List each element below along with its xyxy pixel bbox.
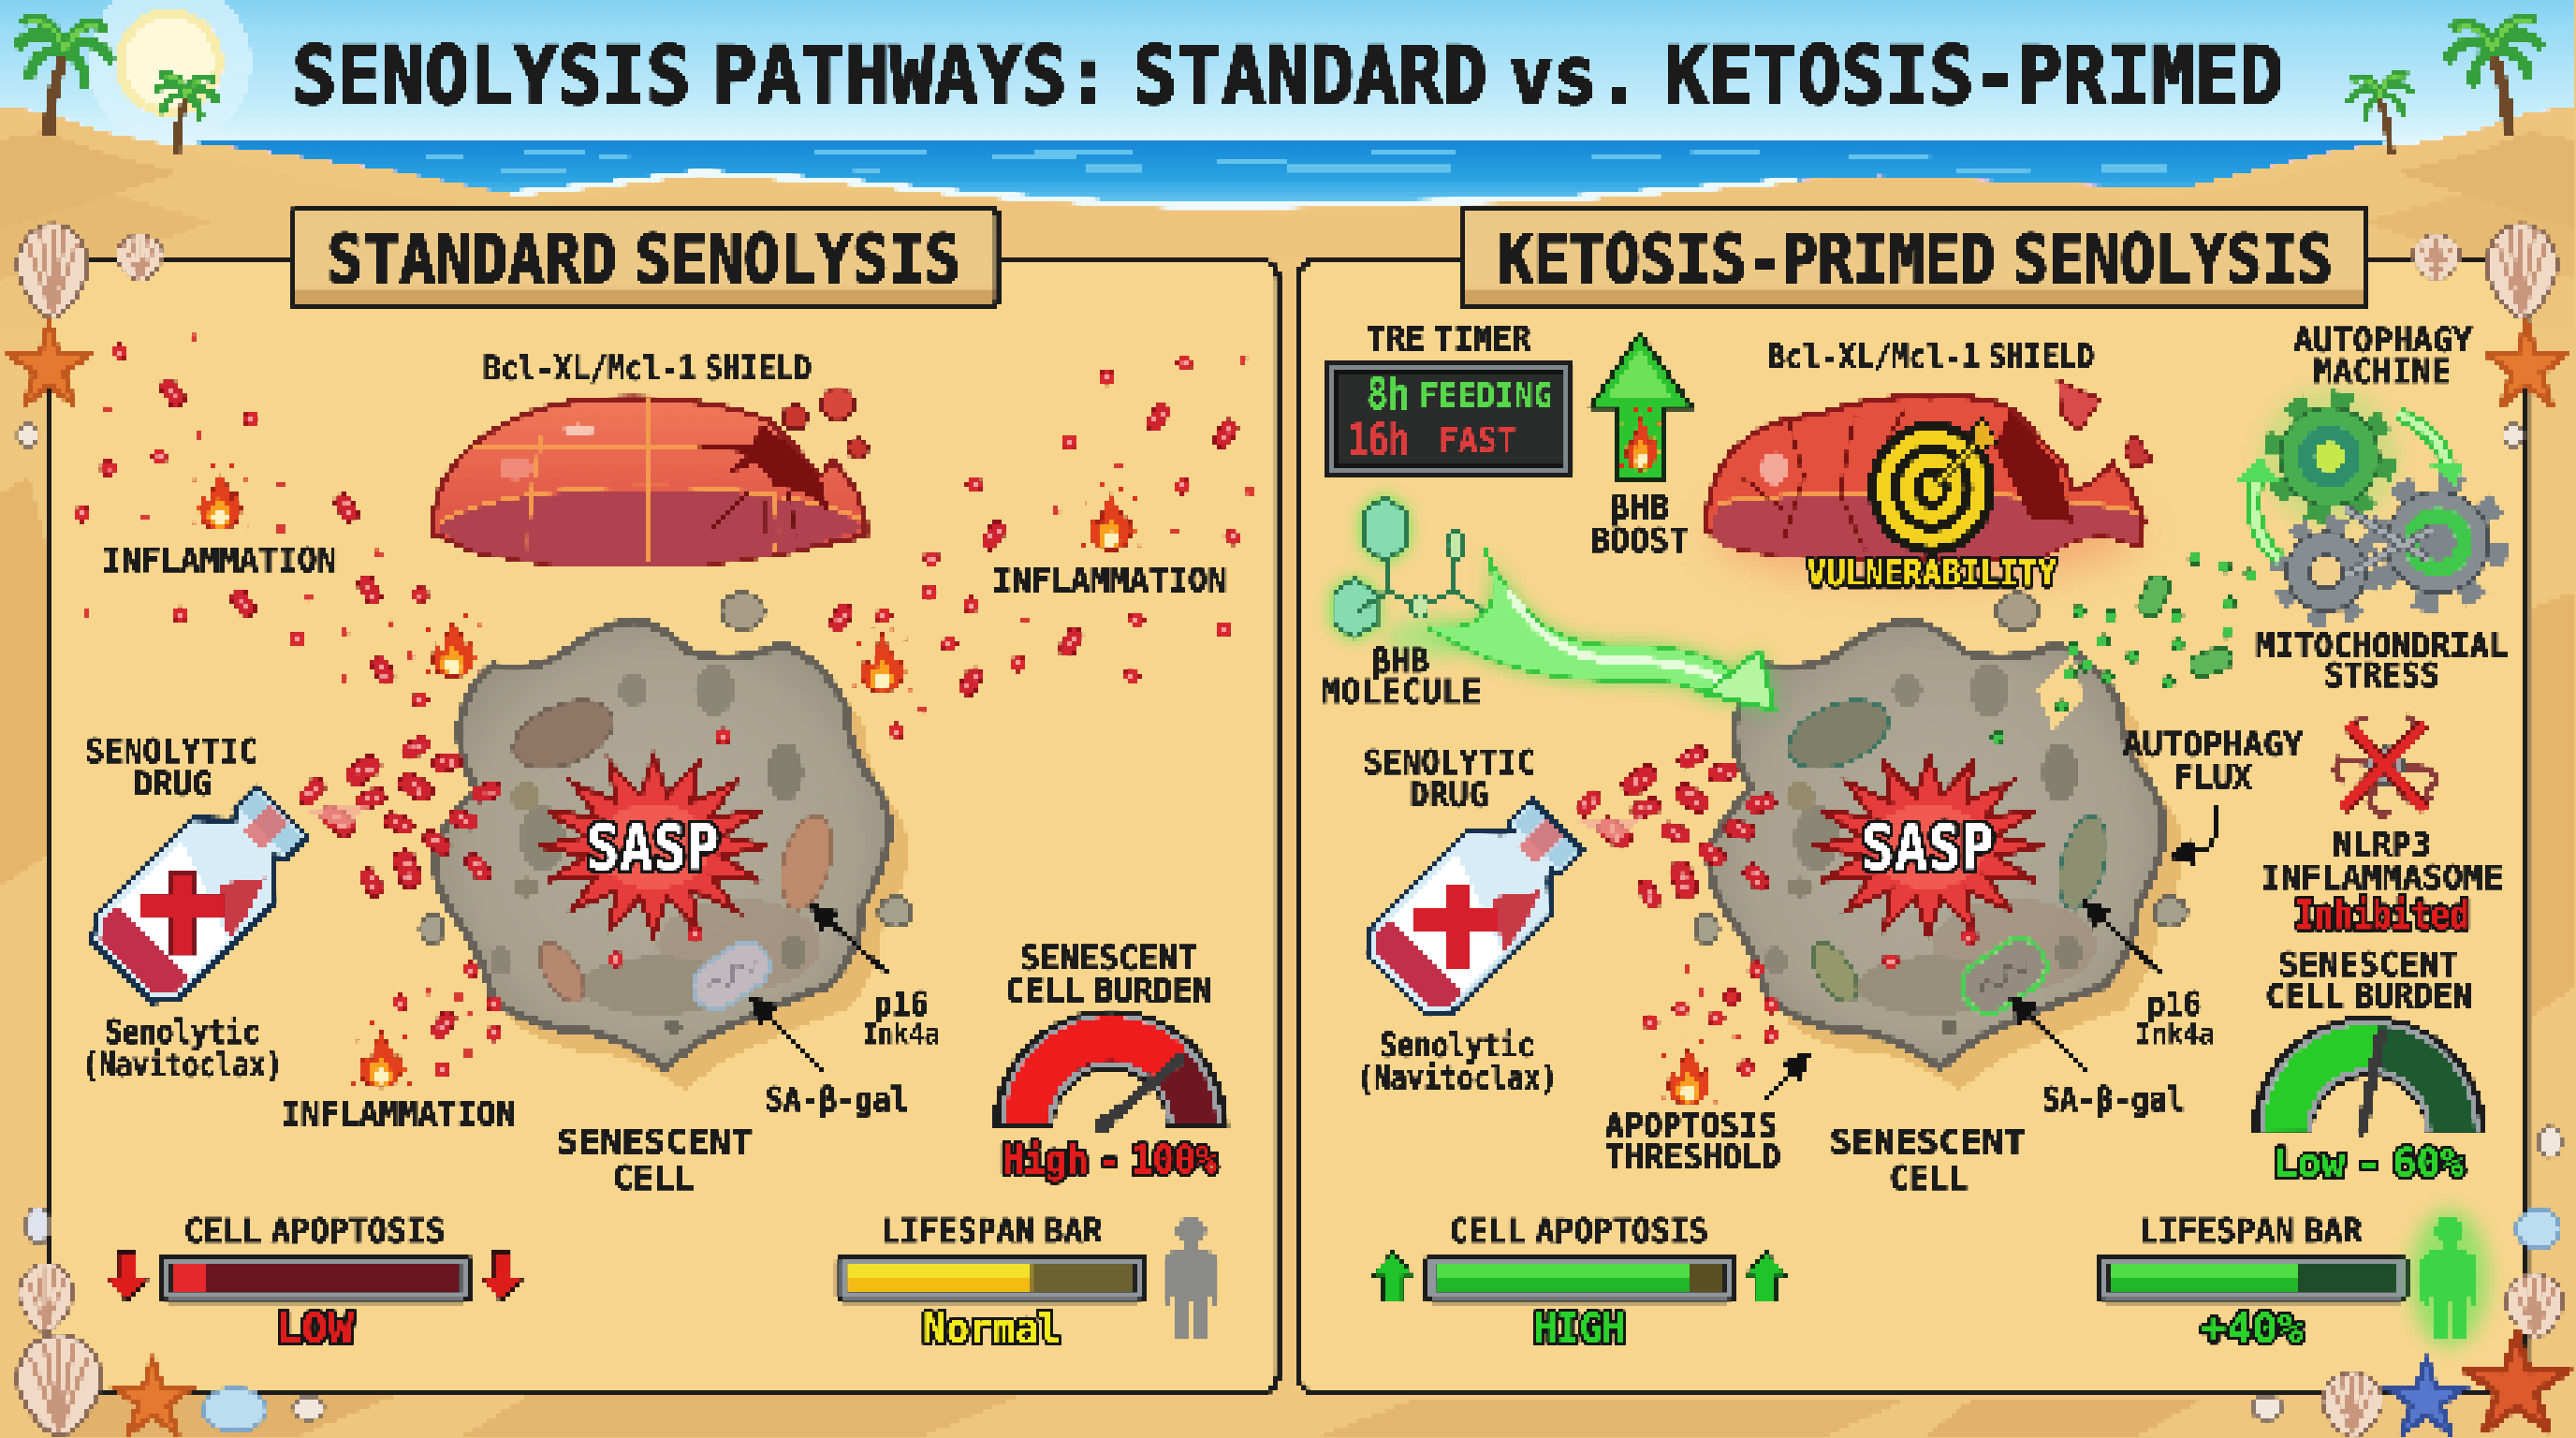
particles: senolytic drug spray [297, 733, 503, 900]
heading: KETOSIS-PRIMED SENOLYSIS [1499, 220, 2333, 299]
label: mitochondrial stress [2256, 627, 2509, 696]
panel: standard senolysis [50, 209, 1278, 1393]
value: low: LOW [276, 1305, 354, 1353]
value: high 100%: High - 100% [1003, 1137, 1218, 1182]
label: p16: p16 [874, 986, 929, 1024]
label: inflammation: INFLAMMATION [281, 1095, 516, 1134]
label: p16 [2136, 986, 2215, 1049]
senescent cell [1695, 594, 2187, 1091]
label: senescent cell: CELL [1889, 1160, 1968, 1198]
label: p16: p16 [2147, 986, 2202, 1024]
label: autophagy machine: MACHINE [2313, 353, 2451, 391]
label: burden: SENESCENT [2278, 946, 2459, 984]
value: vulnerability: VULNERABILITY [1807, 552, 2057, 594]
label: burden [1005, 939, 1212, 1011]
timer readout: feeding: FEEDING [1419, 375, 1552, 416]
label: senolytic drug: DRUG [1410, 777, 1488, 815]
icon: bottom-right shells and starfish [2322, 1210, 2569, 1437]
organelles and markers [1778, 687, 2115, 1022]
panel background [50, 259, 1278, 1393]
label: shield: Bcl-XL/Mcl-1 SHIELD [483, 349, 812, 388]
label: navitoclax [82, 1013, 283, 1085]
label: mitochondrial stress: MITOCHONDRIAL [2256, 627, 2509, 666]
label: senescent cell [557, 1123, 753, 1198]
icon: NLRP3 inflammasome inhibited [2335, 716, 2435, 814]
gauge: cell burden high [1023, 1038, 1197, 1133]
bar: lifespan normal [838, 1216, 1219, 1341]
label: navitoclax: (Navitoclax) [82, 1047, 283, 1085]
label: burden: CELL BURDEN [2265, 977, 2472, 1016]
bar: cell apoptosis high [1371, 1252, 1787, 1301]
label: senolytic drug [85, 732, 258, 803]
particles: inflammatory debris [75, 334, 1254, 1078]
label: cell apoptosis: CELL APOPTOSIS [184, 1212, 446, 1251]
icon: up arrows [1371, 1252, 1787, 1301]
label: senescent cell: SENESCENT [557, 1123, 753, 1162]
label: apoptosis threshold [1605, 1107, 1780, 1177]
label: autophagy machine: AUTOPHAGY [2293, 322, 2473, 360]
label: p16: Ink4a [2135, 1018, 2215, 1049]
label: boost: βHB [1610, 490, 1669, 528]
SASP burst label: SASP [1861, 811, 1995, 884]
label: cell apoptosis: CELL APOPTOSIS [1449, 1212, 1708, 1251]
ocean [172, 139, 2405, 205]
icon: starfish sides [9, 323, 2567, 404]
icon: pebbles [18, 424, 2561, 1419]
timer readout: feeding: 8h [1367, 369, 1410, 420]
illustrations: standard senolysis [50, 209, 1278, 1393]
icon: person green glowing [2410, 1210, 2489, 1347]
arrow: beta-HB to cell [1426, 547, 1774, 710]
label: lifespan bar: LIFESPAN BAR [881, 1212, 1103, 1251]
autophagy flux fragments [1992, 552, 2257, 743]
header plaque [1462, 209, 2367, 307]
label: senescent cell: CELL [613, 1160, 695, 1198]
label: autophagy machine [2293, 322, 2473, 391]
label: burden: SENESCENT [1020, 939, 1197, 977]
icon: autophagy machine gears [2234, 388, 2496, 618]
label: autophagy flux: FLUX [2174, 758, 2252, 797]
label: apoptosis threshold: THRESHOLD [1605, 1138, 1780, 1177]
icon: top-left shells [18, 224, 163, 318]
icon: fire [1661, 1037, 1719, 1104]
label: SA-beta-gal: SA-β-gal [766, 1080, 909, 1119]
SASP burst label: SASP [587, 811, 720, 884]
particles: senolytic drug spray and debris [1573, 743, 1977, 1076]
icon: palm trees [20, 19, 2539, 153]
label: p16: Ink4a [862, 1018, 940, 1049]
arrows to markers [1764, 805, 2215, 1101]
shield: shattered with vulnerability target [1706, 381, 2152, 580]
label: NLRP3 inflammasome: INFLAMMASOME [2261, 858, 2504, 897]
label: NLRP3 inflammasome: NLRP3 [2333, 826, 2431, 864]
label: beta-HB molecule: βHB [1371, 642, 1429, 681]
value: plus 40 percent: +40% [2202, 1305, 2304, 1353]
label: navitoclax: (Navitoclax) [1357, 1060, 1558, 1098]
label: inflammation: INFLAMMATION [102, 542, 337, 580]
value: normal: Normal [923, 1305, 1061, 1353]
panel: ketosis-primed senolysis [1297, 209, 2526, 1393]
label: senescent cell: SENESCENT [1830, 1123, 2026, 1162]
TRE timer display [1327, 361, 1573, 477]
icon: target [1867, 418, 1998, 555]
timer readout: feeding [1367, 369, 1552, 420]
icon: person grey [1164, 1216, 1219, 1341]
timer readout: fast: 16h [1347, 415, 1410, 466]
shield: intact Bcl-XL/Mcl-1 dome with crack [433, 388, 868, 565]
label: navitoclax [1357, 1026, 1558, 1098]
label: senolytic drug [1364, 744, 1536, 815]
label: inflammation: INFLAMMATION [992, 562, 1227, 600]
label: shield: Bcl-XL/Mcl-1 SHIELD [1767, 338, 2095, 376]
label: burden [2265, 946, 2472, 1016]
icon: bottom-left shells and starfish [18, 1264, 266, 1436]
bar: cell apoptosis low [107, 1252, 522, 1301]
header plaque [292, 209, 997, 307]
timer readout: fast: FAST [1439, 420, 1516, 461]
heading: STANDARD SENOLYSIS [327, 220, 961, 299]
labels: standard senolysis [82, 220, 1227, 1353]
value: inhibited: Inhibited [2295, 892, 2469, 938]
icon: down arrows [107, 1252, 522, 1301]
label: burden: CELL BURDEN [1005, 973, 1212, 1011]
label: boost [1590, 490, 1689, 561]
arrows to markers [753, 907, 887, 1073]
icon: top-right shells [2413, 224, 2556, 318]
label: boost: BOOST [1590, 522, 1689, 561]
label: p16 [862, 986, 940, 1049]
label: NLRP3 inflammasome [2261, 826, 2504, 897]
icon: sun [87, 0, 252, 144]
label: beta-HB molecule [1321, 642, 1482, 712]
label: autophagy flux [2122, 726, 2304, 797]
bar: lifespan plus 40 [2098, 1210, 2489, 1347]
value: high: HIGH [1534, 1305, 1625, 1353]
main title: SENOLYSIS PATHWAYS: STANDARD vs. KETOSIS-PRIMED [292, 30, 2283, 124]
timer readout: fast [1347, 415, 1516, 466]
label: navitoclax: Senolytic [1380, 1026, 1534, 1064]
gauge: cell burden low [2282, 1035, 2456, 1134]
label: TRE timer: TRE TIMER [1367, 320, 1531, 359]
label: apoptosis threshold: APOPTOSIS [1605, 1107, 1778, 1145]
label: SA-beta-gal: SA-β-gal [2042, 1080, 2185, 1119]
label: senolytic drug: DRUG [133, 765, 212, 803]
label: beta-HB molecule: MOLECULE [1321, 673, 1482, 712]
molecule: beta-HB [1334, 496, 1486, 657]
labels: ketosis-primed senolysis [1321, 220, 2509, 1353]
illustrations: ketosis-primed senolysis [1297, 209, 2526, 1393]
icon: senolytic drug bottle [80, 770, 370, 1014]
label: senolytic drug: SENOLYTIC [1364, 744, 1536, 783]
label: autophagy flux: AUTOPHAGY [2122, 726, 2304, 764]
icon: senolytic drug bottle [1355, 783, 1643, 1027]
senescent cell [420, 594, 912, 1091]
organelles and markers [504, 687, 841, 1018]
panel background [1297, 259, 2526, 1393]
value: low 60%: Low - 60% [2274, 1140, 2465, 1186]
icon: beta-HB boost arrow [1590, 333, 1692, 481]
label: mitochondrial stress: STRESS [2324, 657, 2439, 696]
sky [0, 0, 2576, 156]
label: senescent cell [1830, 1123, 2026, 1198]
label: lifespan bar: LIFESPAN BAR [2139, 1212, 2363, 1251]
icon: inflammation fires [192, 462, 1141, 1088]
label: navitoclax: Senolytic [105, 1013, 259, 1051]
label: senolytic drug: SENOLYTIC [85, 732, 258, 770]
